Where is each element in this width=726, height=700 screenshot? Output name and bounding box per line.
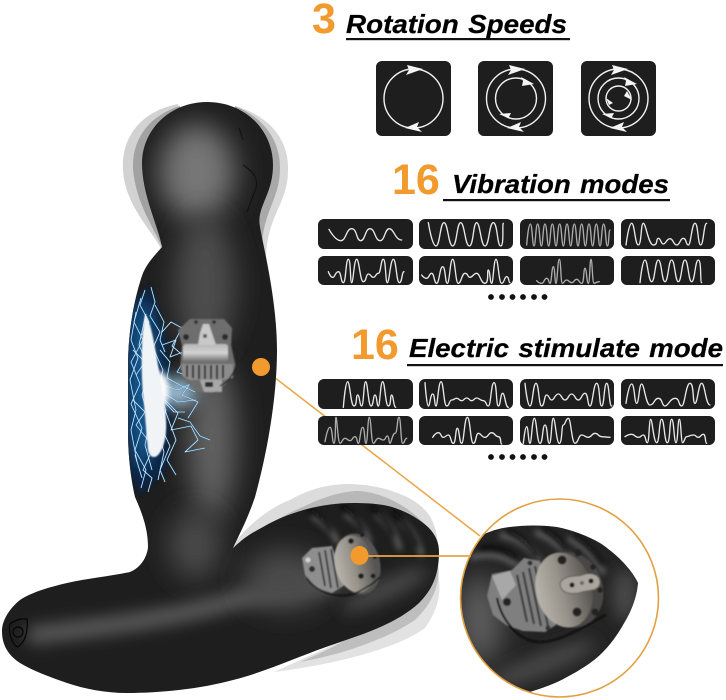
- orange marker dot on shaft: [252, 358, 270, 376]
- leader line: shaft dot to lens: [261, 367, 480, 536]
- heading: 16 Electric stimulate mode: [351, 321, 723, 369]
- icon: rotation speed 1: [376, 61, 451, 136]
- heading: 16 Vibration modes: 16: [392, 156, 440, 204]
- heading: 3 Rotation Speeds: [312, 0, 570, 43]
- motor: rear lobe: [302, 529, 387, 599]
- motion ghost: rear lobe: [232, 484, 440, 672]
- icon: rotation speed 3: [581, 61, 656, 136]
- zoom lens callout: [450, 499, 658, 700]
- icon: control button: [9, 619, 27, 647]
- motor: shaft: [178, 319, 237, 393]
- orange marker dot on motor: [350, 546, 368, 565]
- leader line: motor dot to lens: [360, 555, 471, 557]
- electric stimulation mode panels: [318, 379, 715, 445]
- motion ghost: head of shaft: [123, 104, 288, 300]
- product body: [2, 102, 439, 693]
- heading: 16 Electric stimulate mode: Electric stimulate mode: [409, 333, 723, 363]
- heading: 16 Vibration modes: [392, 156, 670, 204]
- lightning discharge effect: [128, 285, 210, 495]
- heading: 16 Vibration modes: Vibration modes: [452, 169, 669, 199]
- dots: more electric modes: [488, 454, 547, 460]
- vibration mode panels: [318, 219, 715, 285]
- heading: 3 Rotation Speeds: Rotation Speeds: [346, 9, 567, 39]
- white electrode strip: [142, 314, 166, 457]
- dots: more vibration modes: [488, 294, 547, 300]
- icon: rotation speed 2: [478, 61, 553, 136]
- heading: 16 Electric stimulate mode: 16: [351, 321, 399, 369]
